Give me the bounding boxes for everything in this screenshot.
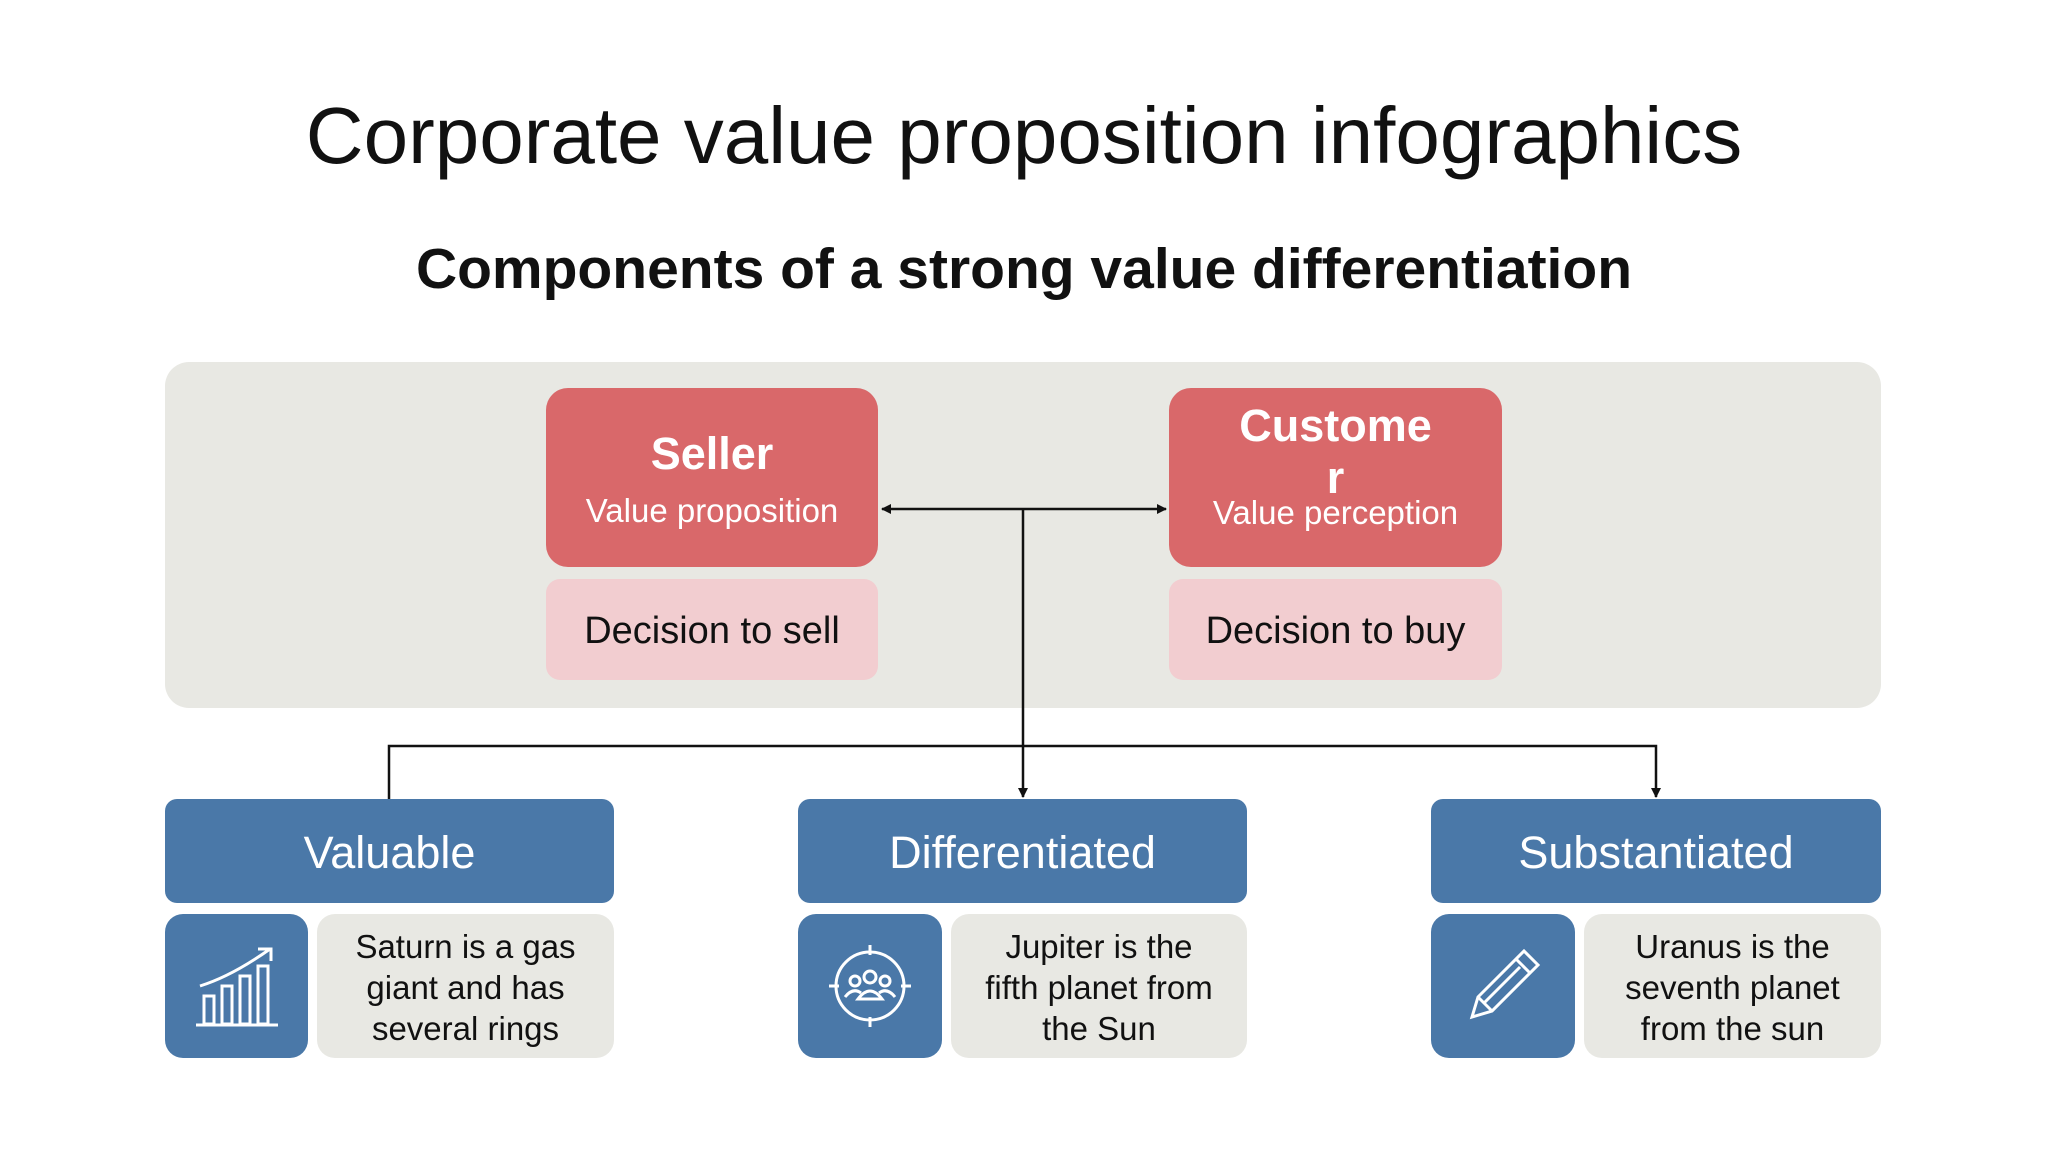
- subtitle: Components of a strong value differentiation: [416, 237, 1632, 301]
- header: Differentiated: [798, 799, 1247, 903]
- text: Uranus: Uranus is the: [1635, 928, 1830, 965]
- decision to sell: [546, 579, 878, 680]
- text: Uranus: [1584, 914, 1881, 1058]
- seller box: [546, 388, 878, 567]
- text: Jupiter: the Sun: [1042, 1010, 1156, 1047]
- header: Substantiated: [1431, 799, 1881, 903]
- header: Differentiated: Differentiated: [889, 827, 1156, 878]
- text: Jupiter: fifth planet from: [985, 969, 1213, 1006]
- text: Uranus: seventh planet: [1625, 969, 1840, 1006]
- icon: pencil: [1431, 914, 1575, 1058]
- title: Corporate value proposition infographics: [306, 91, 1742, 180]
- customer box: [1169, 388, 1502, 567]
- text: Jupiter: Jupiter is the: [1005, 928, 1193, 965]
- icon: chart: [165, 914, 308, 1058]
- seller box: Seller: [651, 428, 773, 479]
- decision to buy: Decision to buy: [1206, 610, 1465, 652]
- seller box: Value proposition: [586, 492, 838, 529]
- header: Valuable: [165, 799, 614, 903]
- customer box: Value perception: [1213, 494, 1458, 531]
- text: Saturn: Saturn is a gas: [355, 928, 576, 965]
- customer box: Custome: [1239, 400, 1432, 451]
- customer box: r: [1327, 452, 1344, 503]
- panel: background: [165, 362, 1881, 708]
- decision to buy: [1169, 579, 1502, 680]
- header: Valuable: Valuable: [304, 827, 475, 878]
- text: Jupiter: [951, 914, 1247, 1058]
- text: Saturn: [317, 914, 614, 1058]
- icon: target group: [798, 914, 942, 1058]
- text: Saturn: several rings: [372, 1010, 559, 1047]
- header: Substantiated: Substantiated: [1518, 827, 1794, 878]
- text: Saturn: giant and has: [366, 969, 565, 1006]
- decision to sell: Decision to sell: [584, 610, 840, 652]
- text: Uranus: from the sun: [1641, 1010, 1824, 1047]
